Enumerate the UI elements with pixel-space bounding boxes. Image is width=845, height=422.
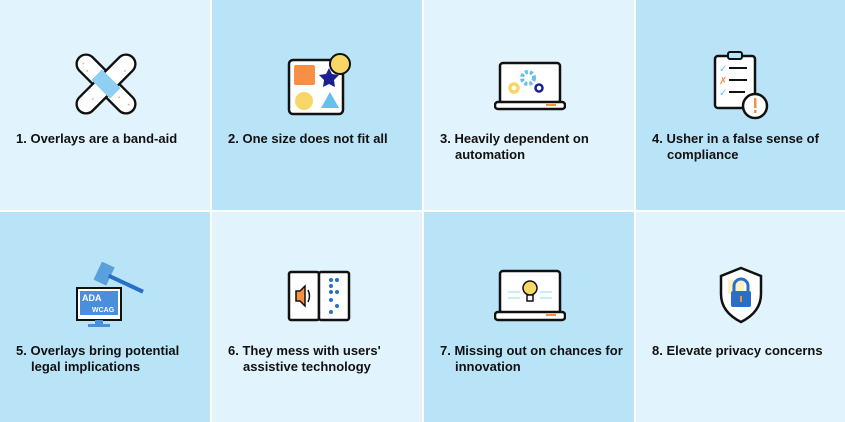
icon: clipboard with alert (714, 51, 768, 120)
icon: shapes board (288, 53, 351, 116)
panel 4: compliance (636, 0, 845, 210)
icon: gavel and ADA monitor: WCAG (92, 307, 115, 314)
icon: laptop with light bulb (494, 270, 566, 322)
text 7: 7. Missing out on chances for innovation (440, 343, 623, 374)
text 2: 2. One size does not fit all (228, 131, 388, 146)
icon: shield with lock (720, 266, 762, 324)
icon: gavel and ADA monitor (76, 262, 144, 327)
panel 1: band-aid (0, 0, 210, 210)
icon: gavel and ADA monitor: ADA (82, 293, 102, 303)
panel 6: assistive technology (212, 212, 422, 422)
icon: speaker and braille book (288, 270, 350, 322)
text 3: 3. Heavily dependent on automation (440, 131, 589, 162)
icon: clipboard with alert: ✗ (719, 76, 727, 87)
text 8: 8. Elevate privacy concerns (652, 343, 823, 358)
panel 8: privacy (636, 212, 845, 422)
panel 3: automation (424, 0, 634, 210)
panel 2: one size (212, 0, 422, 210)
text 4: 4. Usher in a false sense of compliance (652, 131, 819, 162)
text 5: 5. Overlays bring potential legal implications (16, 343, 179, 374)
icon: clipboard with alert: ✓ (719, 64, 727, 75)
icon: clipboard with alert: ✓ (719, 88, 727, 99)
icon: laptop with gears (494, 62, 566, 110)
text 1: 1. Overlays are a band-aid (16, 131, 177, 146)
panel 5: legal (0, 212, 210, 422)
icon: crossed band-aids (75, 54, 137, 114)
panel 7: innovation (424, 212, 634, 422)
text 6: 6. They mess with users' assistive technology (228, 343, 381, 374)
